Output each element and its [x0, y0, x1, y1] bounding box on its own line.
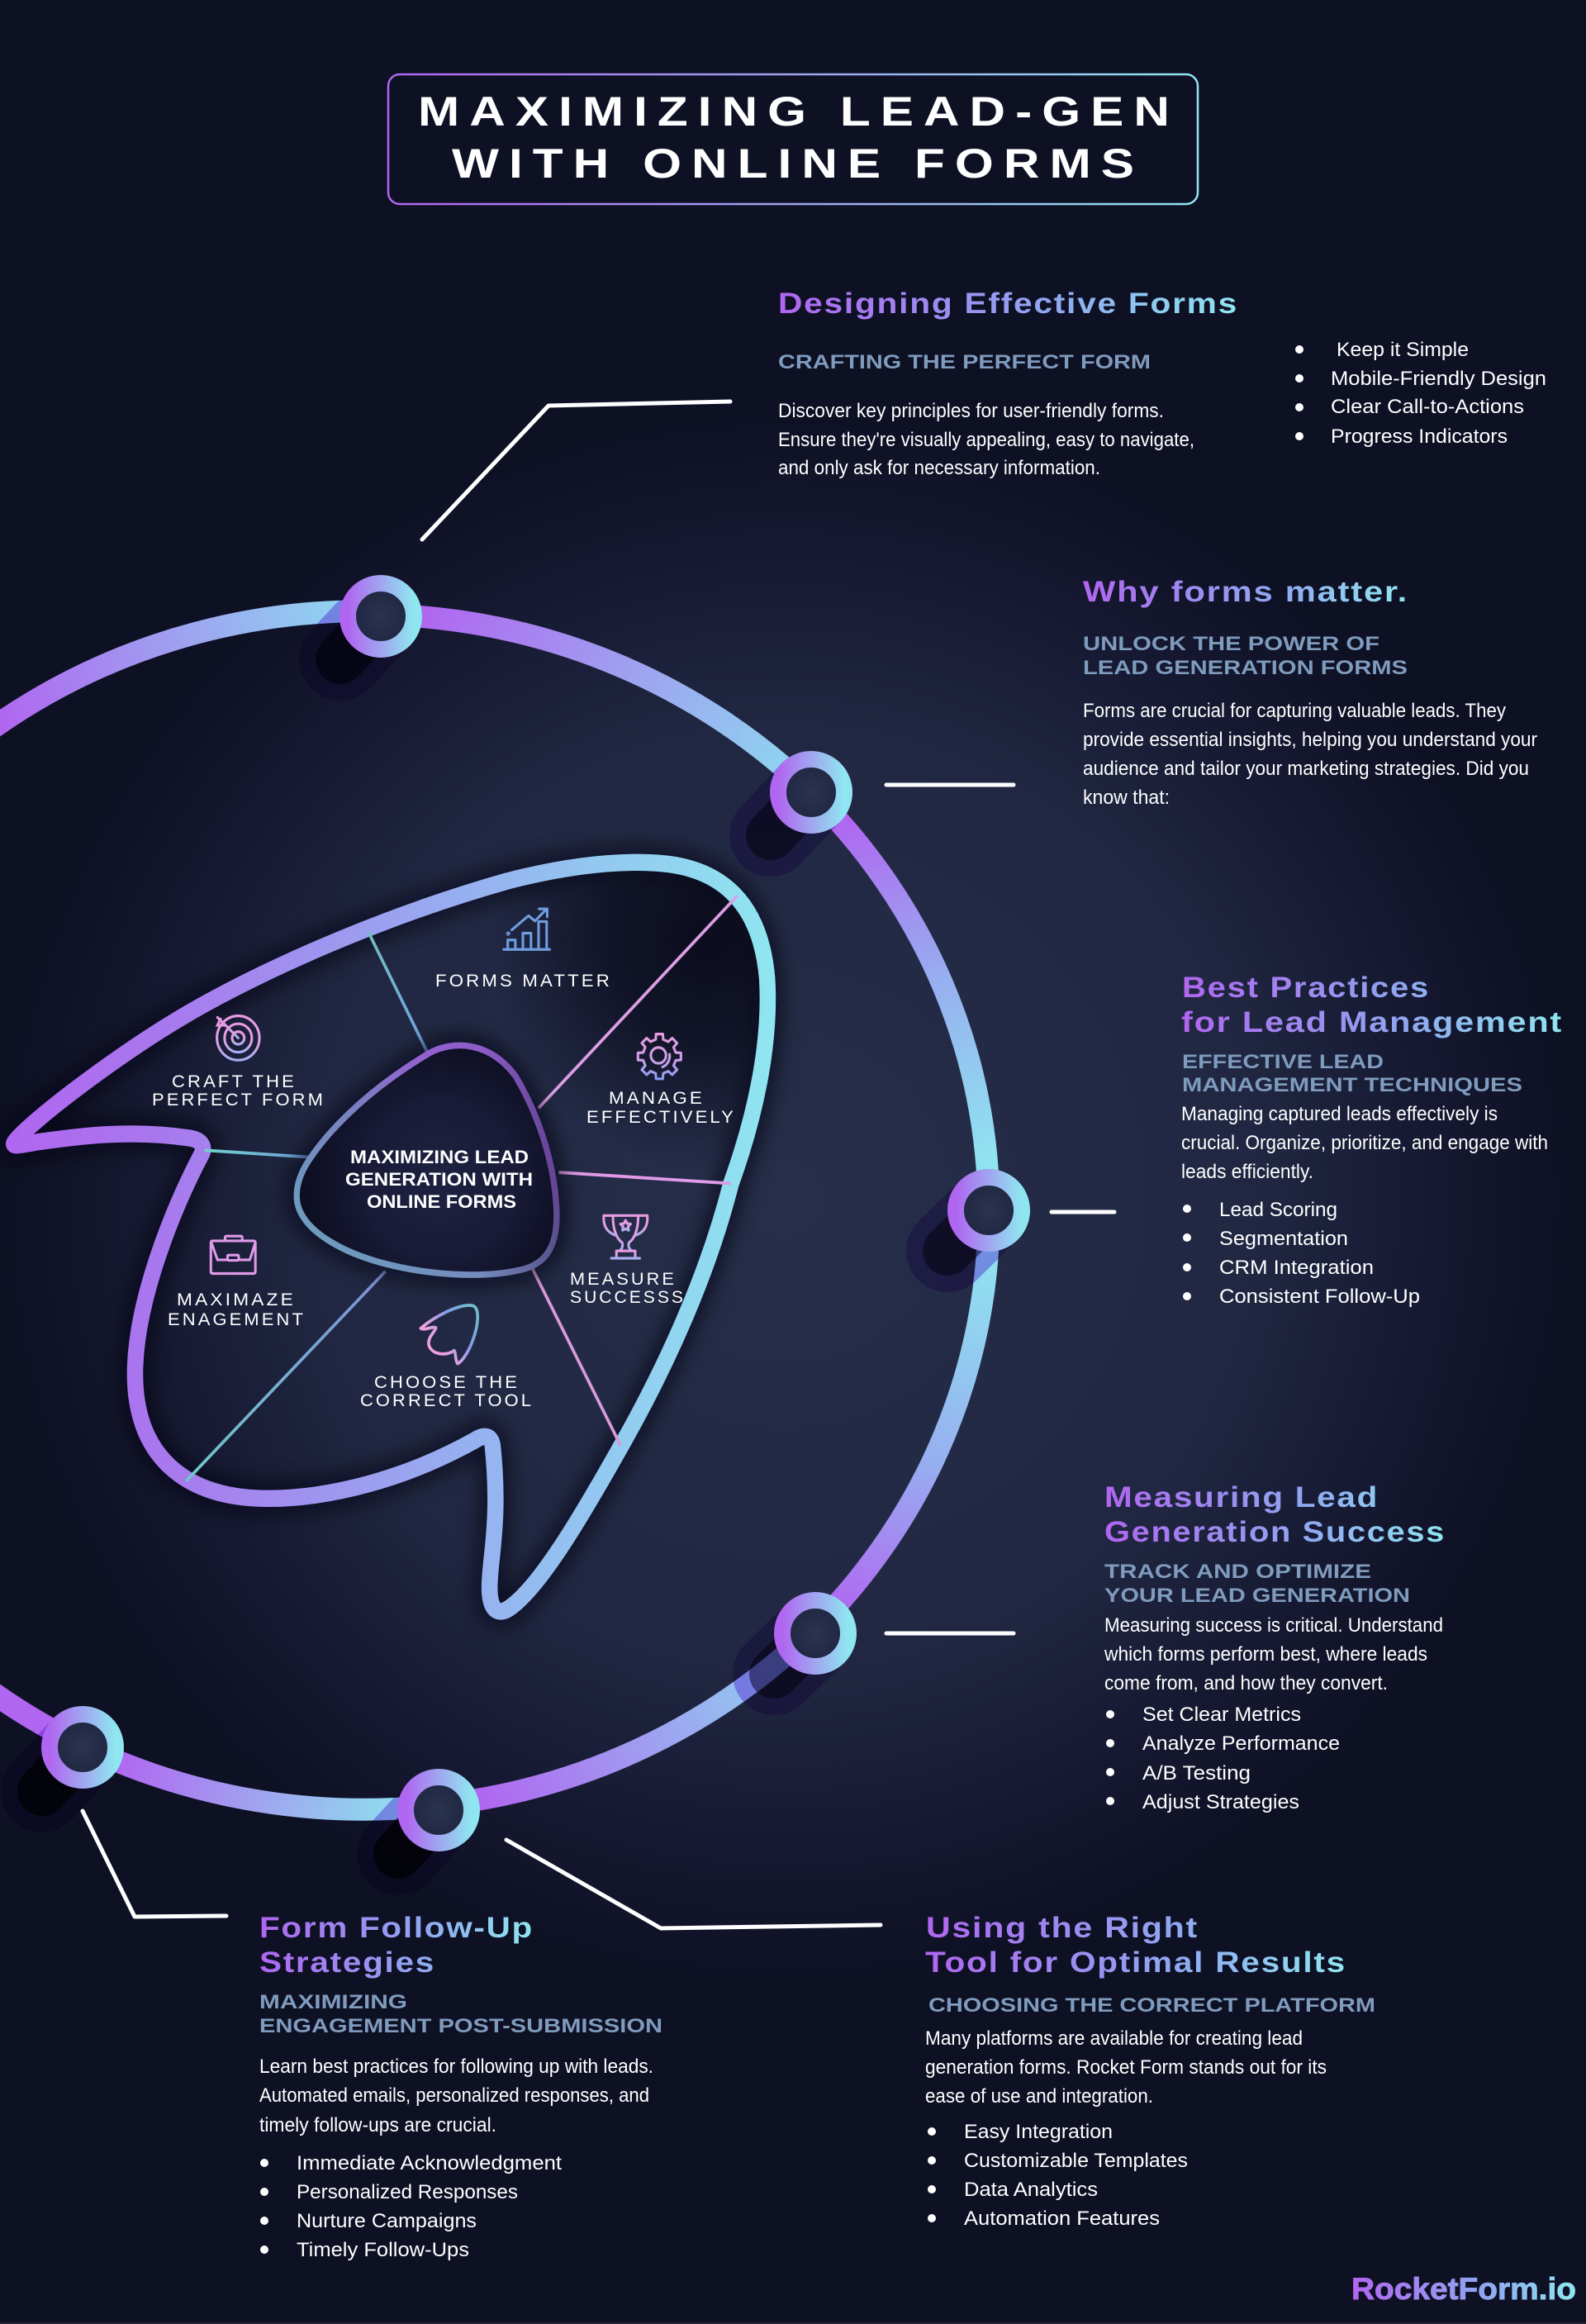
center hub — [297, 1045, 557, 1275]
heading: Form Follow-Up — [259, 1912, 534, 1944]
body text: Forms are crucial for capturing valuable leads. They — [1083, 700, 1506, 722]
heading: Designing Effective Forms — [778, 288, 1238, 320]
heading: for Lead Management — [1181, 1006, 1563, 1038]
body text: Automated emails, personalized responses, and — [259, 2084, 649, 2107]
label: measure success: SUCCESSS — [570, 1288, 686, 1307]
leader lines — [83, 402, 1114, 1928]
heading — [1104, 1481, 1446, 1548]
body text: audience and tailor your marketing strategies. Did you — [1083, 758, 1529, 780]
body text: which forms perform best, where leads — [1104, 1643, 1427, 1666]
bullet list: Lead Scoring — [1219, 1199, 1337, 1221]
label: measure success: MEASURE — [570, 1270, 677, 1289]
label: manage effectively: EFFECTIVELY — [586, 1108, 736, 1127]
bullet list: CRM Integration — [1219, 1257, 1374, 1279]
heading: Why forms matter. — [1083, 576, 1408, 608]
bullet list: Timely Follow-Ups — [297, 2239, 469, 2261]
body text: Learn best practices for following up with leads. — [259, 2055, 653, 2078]
title banner: MAXIMIZING LEAD-GEN — [418, 88, 1180, 135]
icon: target — [217, 1016, 259, 1060]
label: manage effectively — [586, 1089, 736, 1127]
body text — [925, 2027, 1327, 2108]
bullet list: Progress Indicators — [1331, 425, 1508, 448]
bullet list — [1295, 339, 1546, 448]
subheading: CHOOSING THE CORRECT PLATFORM — [928, 1994, 1375, 2017]
bullet list — [1106, 1704, 1340, 1813]
icon: gear — [638, 1034, 681, 1079]
body text: and only ask for necessary information. — [778, 457, 1100, 479]
body text: Measuring success is critical. Understand — [1104, 1614, 1443, 1637]
subheading: UNLOCK THE POWER OF — [1083, 633, 1379, 655]
bullet list: Data Analytics — [964, 2179, 1098, 2201]
orbit ring with six segments — [0, 611, 989, 1809]
body text: Managing captured leads effectively is — [1181, 1103, 1498, 1125]
body text — [1083, 700, 1537, 809]
rocket diagram — [0, 839, 790, 1633]
icon: chart — [504, 909, 549, 949]
bullet list: Automation Features — [964, 2208, 1160, 2230]
bullet list: Consistent Follow-Up — [1219, 1286, 1420, 1308]
bullet list — [1183, 1199, 1420, 1308]
panel: why forms matter — [1083, 576, 1537, 809]
label: manage effectively: MANAGE — [609, 1089, 705, 1108]
subheading — [1182, 1051, 1522, 1096]
bullet list: Immediate Acknowledgment — [297, 2152, 562, 2174]
rocket outline — [14, 863, 767, 1611]
body text: Ensure they're visually appealing, easy to navigate, — [778, 429, 1194, 451]
body text: come from, and how they convert. — [1104, 1672, 1388, 1694]
subheading: EFFECTIVE LEAD — [1182, 1051, 1384, 1073]
body text — [1181, 1103, 1548, 1183]
bullet list: A/B Testing — [1142, 1762, 1251, 1785]
node: best practices — [956, 1177, 1022, 1243]
heading: Tool for Optimal Results — [925, 1946, 1346, 1979]
body text: Many platforms are available for creating lead — [925, 2027, 1303, 2050]
bullet list: Adjust Strategies — [1142, 1791, 1299, 1813]
label: maximaze engagement — [168, 1290, 306, 1329]
subheading — [259, 1991, 662, 2037]
body text: leads efficiently. — [1181, 1161, 1313, 1183]
body text: ease of use and integration. — [925, 2085, 1153, 2108]
panel: using the right tool — [925, 1912, 1375, 2230]
body text — [259, 2055, 653, 2136]
heading — [259, 1912, 534, 1979]
brand logo text: RocketForm.io — [1351, 2272, 1576, 2306]
panel: best practices — [1181, 972, 1563, 1308]
label: forms matter: FORMS MATTER — [435, 972, 612, 991]
bullet list: Nurture Campaigns — [297, 2210, 477, 2232]
label: craft the perfect form — [152, 1072, 325, 1110]
heading — [925, 1912, 1346, 1979]
bullet list — [928, 2121, 1188, 2230]
bullet list — [260, 2152, 562, 2261]
body text: Discover key principles for user-friendly forms. — [778, 400, 1164, 422]
node: designing effective forms — [348, 583, 414, 649]
center hub label: MAXIMIZING LEAD — [350, 1147, 529, 1167]
bullet list: Keep it Simple — [1337, 339, 1469, 361]
body text — [1104, 1614, 1443, 1694]
icon: mini rocket — [420, 1305, 477, 1364]
body text: generation forms. Rocket Form stands out for its — [925, 2056, 1327, 2079]
node: why forms matter — [778, 759, 844, 825]
subheading — [1104, 1561, 1410, 1607]
bullet list: Mobile-Friendly Design — [1331, 368, 1546, 390]
subheading: MAXIMIZING — [259, 1991, 407, 2013]
subheading: TRACK AND OPTIMIZE — [1104, 1561, 1371, 1583]
center hub label — [345, 1147, 533, 1212]
heading: Measuring Lead — [1104, 1481, 1379, 1514]
center hub label: ONLINE FORMS — [367, 1191, 516, 1212]
heading — [1181, 972, 1563, 1038]
bullet list: Customizable Templates — [964, 2150, 1188, 2172]
heading: Generation Success — [1104, 1516, 1446, 1548]
label: choose the correct tool: CORRECT TOOL — [360, 1391, 534, 1410]
heading: Best Practices — [1182, 972, 1430, 1004]
panel: measuring success — [1104, 1481, 1446, 1813]
title banner — [388, 74, 1198, 204]
body text — [778, 400, 1194, 479]
heading: Using the Right — [926, 1912, 1199, 1944]
segment dividers — [186, 896, 738, 1481]
body text: provide essential insights, helping you understand your — [1083, 729, 1537, 751]
bullet list: Segmentation — [1219, 1228, 1348, 1250]
bullet list: Easy Integration — [964, 2121, 1113, 2143]
node: follow-up — [50, 1714, 116, 1780]
icon: briefcase — [211, 1236, 255, 1273]
label: craft the perfect form: CRAFT THE — [172, 1072, 297, 1091]
node: right tool — [406, 1777, 472, 1843]
panel: form follow-up strategies — [259, 1912, 662, 2261]
node shadows — [42, 616, 989, 1854]
bullet list: Set Clear Metrics — [1142, 1704, 1301, 1726]
title banner: WITH ONLINE FORMS — [452, 140, 1144, 187]
bullet list: Clear Call-to-Actions — [1331, 396, 1524, 418]
subheading: MANAGEMENT TECHNIQUES — [1182, 1074, 1522, 1096]
node: measuring success — [782, 1600, 848, 1666]
label: maximaze engagement: ENAGEMENT — [168, 1310, 306, 1329]
subheading — [1083, 633, 1408, 679]
panel: designing effective forms — [778, 288, 1546, 479]
label: choose the correct tool — [360, 1373, 534, 1410]
center hub label: GENERATION WITH — [345, 1169, 533, 1190]
bullet list: Personalized Responses — [297, 2181, 518, 2203]
label: maximaze engagement: MAXIMAZE — [177, 1290, 296, 1309]
subheading: LEAD GENERATION FORMS — [1083, 657, 1408, 679]
subheading: YOUR LEAD GENERATION — [1104, 1585, 1410, 1607]
subheading: CRAFTING THE PERFECT FORM — [778, 351, 1151, 373]
icon: trophy — [604, 1215, 648, 1258]
subheading: ENGAGEMENT POST-SUBMISSION — [259, 2015, 662, 2037]
body text: timely follow-ups are crucial. — [259, 2114, 496, 2136]
body text: crucial. Organize, prioritize, and engage with — [1181, 1132, 1548, 1154]
label: measure success — [570, 1270, 686, 1307]
body text: know that: — [1083, 787, 1170, 809]
label: choose the correct tool: CHOOSE THE — [374, 1373, 520, 1392]
label: craft the perfect form: PERFECT FORM — [152, 1091, 325, 1110]
bullet list: Analyze Performance — [1142, 1732, 1340, 1755]
heading: Strategies — [259, 1946, 435, 1979]
